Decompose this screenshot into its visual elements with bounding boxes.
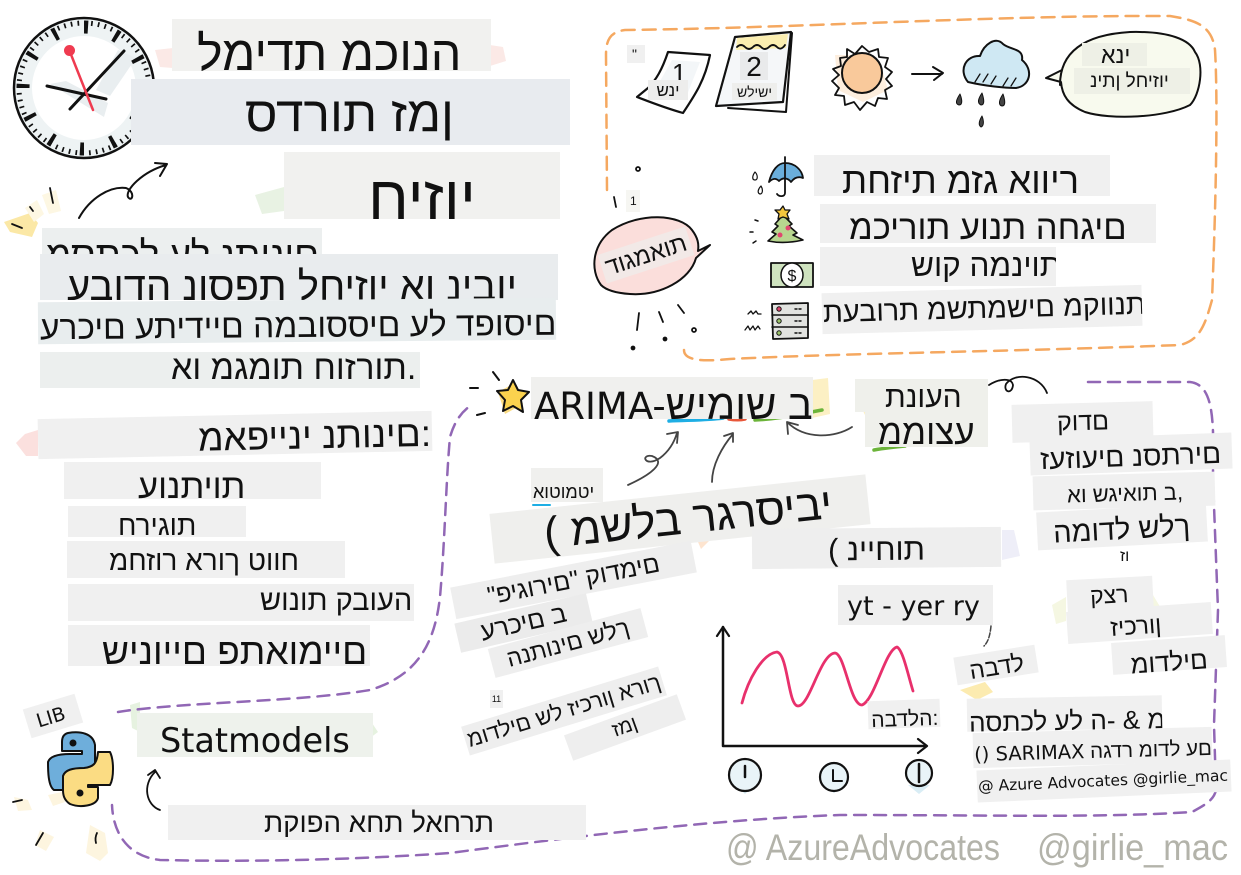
note: small mark	[490, 690, 503, 708]
icon: star	[470, 372, 529, 415]
speech bubble: forecast	[1046, 32, 1200, 117]
label: combines regressive	[489, 474, 871, 564]
icon: money: $	[788, 268, 797, 285]
label: automatic	[531, 468, 603, 502]
note: values in: ערכים ב	[478, 600, 569, 646]
icon: Python logo	[48, 732, 113, 806]
right note: or errors in	[1033, 472, 1215, 510]
note: small mark: 11	[492, 694, 501, 704]
panel: data characteristics heading	[38, 411, 432, 459]
label: automatic: אוטומטי	[533, 482, 594, 502]
icon: money	[771, 263, 813, 287]
intro line 4	[40, 352, 420, 388]
calendar two day: שלישי	[737, 84, 772, 100]
credit line: @ Azure Advocates @girlie_mac	[978, 767, 1228, 795]
label: LIB	[23, 694, 83, 738]
label: LIB: LIB	[34, 703, 68, 732]
label number	[626, 190, 640, 212]
bubble text: I	[1082, 43, 1147, 66]
intro line 2	[40, 254, 558, 300]
border: orange dashed frame	[606, 16, 1216, 360]
icon: holiday tree	[750, 206, 803, 243]
list item: constant variance	[68, 584, 414, 621]
title line 2	[131, 79, 570, 145]
calendar two number	[740, 52, 768, 80]
bubble text: can forecast	[1074, 68, 1190, 94]
note: set model with SARIMAX: () SARIMAX הגדר מודל עם	[974, 737, 1212, 766]
right note: memory: זיכרון	[1109, 612, 1162, 642]
border: purple dashed frame	[112, 382, 1218, 861]
note: time	[564, 694, 686, 761]
example: stock market	[820, 247, 1056, 286]
ticks near clock	[12, 188, 53, 228]
right note: short: קצר	[1089, 581, 1129, 609]
label: difference	[953, 645, 1039, 685]
right note: your model: המודל שלך	[1052, 510, 1191, 550]
right note: hidden shocks: זעזועים נסתרים	[1040, 438, 1222, 475]
icon: server rack	[745, 303, 808, 339]
right note: models	[1111, 635, 1227, 675]
handle: girlie_mac: @girlie_mac	[1037, 827, 1228, 868]
formula: yt - yer ry	[847, 591, 980, 622]
label: Statmodels	[137, 713, 373, 757]
note: prior lags: "פיגורים" קודמים	[485, 550, 662, 610]
calendar one number: 1	[672, 58, 686, 88]
icon: umbrella	[753, 157, 803, 196]
icon: wall clock	[14, 18, 154, 158]
calendar one day	[648, 80, 688, 100]
ticks around examples bubble	[614, 167, 696, 350]
list item: long-term cycle: מחזור ארוך טווח	[109, 545, 299, 576]
note: time: זמן	[609, 712, 641, 742]
note: values in	[454, 593, 593, 653]
note: prior lags	[450, 541, 697, 619]
chart label	[868, 699, 940, 729]
right note: small mark: זו	[1120, 548, 1129, 565]
credit line	[976, 759, 1232, 803]
panel: data characteristics heading: מאפייני נתונים:	[198, 413, 431, 459]
ticks near Python logo	[13, 800, 97, 845]
icon: rain cloud	[956, 41, 1029, 127]
title line 3	[284, 152, 560, 219]
list item: seasonality	[64, 462, 321, 499]
formula	[838, 585, 993, 625]
note: long memory models: מודלים של זיכרון ארוך	[464, 669, 664, 752]
right note: previous: קודם	[1057, 407, 1109, 437]
label: one period to the next	[168, 805, 586, 840]
right note: your model	[1036, 504, 1208, 550]
right note: or errors in: או שגיאות ב,	[1067, 479, 1183, 507]
bubble text: can forecast: ניתן לחיזוי	[1090, 71, 1169, 92]
arrow: clock pointer	[79, 163, 167, 218]
calendar one day: שני	[656, 81, 680, 100]
right note: previous	[1012, 401, 1153, 443]
arrow: statmodels	[147, 770, 160, 810]
arrows pointing at ARIMA heading	[628, 377, 1047, 485]
label: moving	[855, 379, 988, 412]
list item: constant variance: שונות קבועה	[260, 585, 412, 617]
label: difference: הבדל	[968, 650, 1026, 685]
label: combines regressive: ( משלב רגרסיבי	[542, 479, 835, 558]
list item: long-term cycle	[67, 541, 345, 578]
icon: calendar page one	[637, 52, 710, 113]
label: one period to the next: תקופה אחת לאחרת	[264, 807, 494, 838]
label: stationarity: ( נייחות	[828, 532, 925, 567]
right note: memory	[1066, 602, 1213, 644]
icon: calendar page two	[716, 32, 792, 112]
label number: 1	[630, 194, 637, 208]
icon: time markers	[729, 759, 932, 794]
arrow: sun to rain	[912, 67, 943, 80]
right note: short	[1066, 576, 1154, 613]
icon: sun	[832, 46, 892, 110]
note: your data: הנתונים שלך	[504, 614, 632, 672]
dashed connector near chart	[984, 626, 991, 646]
calendar mark: "	[632, 46, 637, 62]
line chart	[717, 627, 927, 753]
speech bubble: examples	[594, 217, 710, 294]
handle: AzureAdvocates: @ AzureAdvocates	[726, 827, 1000, 868]
title line 2: סדרות זמן	[245, 86, 454, 142]
calendar mark	[627, 45, 645, 63]
underlines below ARIMA heading	[533, 410, 905, 505]
label: stationarity	[752, 527, 1001, 569]
note: your data	[488, 608, 648, 678]
examples bubble label: דוגמאות	[602, 230, 690, 281]
list item: outliers	[68, 506, 246, 537]
example: online user traffic: תעבורת משתמשים מקוונת	[823, 289, 1142, 329]
